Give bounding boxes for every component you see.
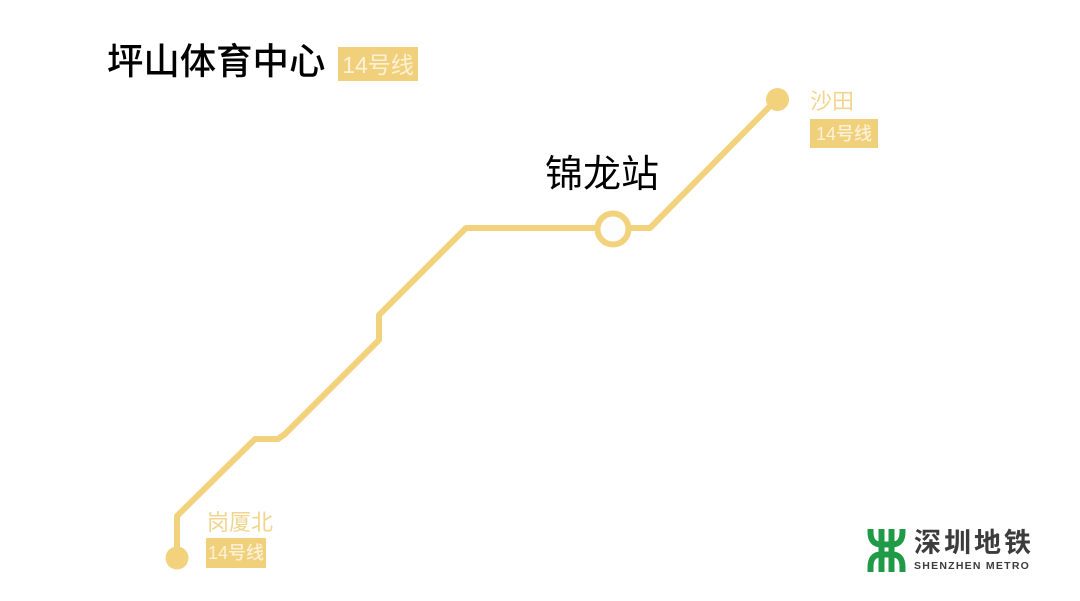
line badge: 沙田 <box>810 119 878 148</box>
title: 坪山体育中心 <box>107 41 325 82</box>
station name: 锦龙站: 锦龙站 <box>545 154 659 196</box>
line badge: 沙田: 14号线 <box>816 124 872 144</box>
logo text: English name: SHENZHEN METRO <box>914 560 1030 572</box>
line badge: title: 14号线 <box>342 52 414 78</box>
route line <box>177 99 777 558</box>
Shenzhen Metro logo <box>868 528 1034 572</box>
station name: 岗厦北: 岗厦北 <box>207 510 273 535</box>
station name: 沙田: 沙田 <box>810 89 854 114</box>
current station marker: 锦龙站 <box>598 214 628 244</box>
line badge: 岗厦北: 14号线 <box>208 543 264 563</box>
logo text: Chinese name: 深圳地铁 <box>914 528 1034 558</box>
terminal station: 沙田 <box>766 88 789 111</box>
icon: metro symbol <box>868 529 906 572</box>
line badge: title <box>338 47 418 81</box>
line badge: 岗厦北 <box>206 538 266 568</box>
terminal station: 岗厦北 <box>166 546 188 570</box>
